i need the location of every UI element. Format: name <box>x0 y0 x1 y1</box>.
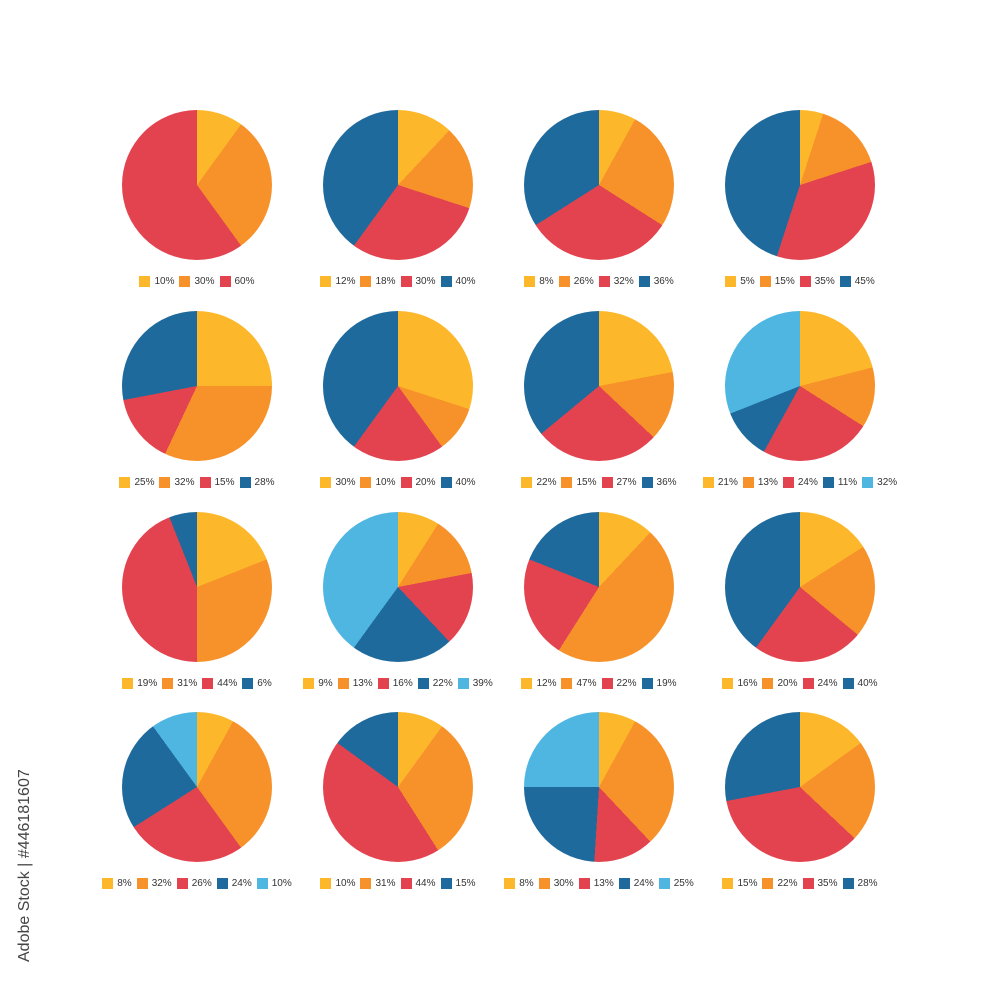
legend 12: 40% <box>858 678 878 688</box>
legend 2: 18% <box>375 276 396 286</box>
legend 3: 8% <box>539 276 554 286</box>
pie 11 <box>524 512 674 662</box>
legend 15: 13% <box>594 878 614 888</box>
legend 11 <box>521 678 677 689</box>
legend 3: 26% <box>574 276 594 286</box>
legend 15: 24% <box>634 878 654 888</box>
pie 8 <box>725 311 875 461</box>
legend 10: 22% <box>433 678 453 688</box>
legend 11: 22% <box>616 678 637 688</box>
pie 14 <box>323 712 473 862</box>
legend 16: 22% <box>777 878 798 888</box>
legend 4: 5% <box>740 276 755 286</box>
legend 8: 21% <box>718 476 738 488</box>
legend 5: 32% <box>174 476 194 488</box>
legend 10 <box>303 678 493 689</box>
legend 9: 6% <box>257 678 272 688</box>
legend 15 <box>504 878 694 889</box>
legend 7 <box>521 476 677 488</box>
legend 1 <box>139 276 255 287</box>
legend 14: 31% <box>375 878 396 888</box>
legend 14: 10% <box>335 878 355 888</box>
legend 5: 25% <box>134 476 154 488</box>
pie 2 <box>323 110 473 260</box>
pie 9 <box>122 512 272 662</box>
legend 16 <box>722 878 878 889</box>
legend 9 <box>122 678 272 689</box>
legend 13 <box>102 878 292 889</box>
legend 3: 36% <box>654 276 674 286</box>
legend 3: 32% <box>614 276 634 286</box>
legend 6: 40% <box>456 476 476 488</box>
legend 4: 35% <box>815 276 835 286</box>
legend 7: 27% <box>616 476 637 488</box>
pie 15 <box>524 712 674 862</box>
pie 16 <box>725 712 875 862</box>
legend 12: 20% <box>777 678 798 688</box>
legend 13: 24% <box>232 878 252 888</box>
legend 7: 22% <box>536 476 556 488</box>
legend 16: 15% <box>737 878 757 888</box>
legend 14 <box>320 878 476 889</box>
legend 3 <box>524 276 674 287</box>
legend 10: 9% <box>318 678 333 688</box>
legend 6: 10% <box>375 476 396 488</box>
legend 2: 30% <box>416 276 436 286</box>
legend 6: 20% <box>416 476 436 488</box>
pie 7 <box>524 311 674 461</box>
legend 12 <box>722 678 878 689</box>
legend 5: 28% <box>255 476 275 488</box>
legend 8: 11% <box>838 476 857 488</box>
legend 15: 25% <box>674 878 694 888</box>
pie 5 <box>122 311 272 461</box>
legend 4: 15% <box>775 276 795 286</box>
legend 7: 36% <box>657 476 677 488</box>
legend 8: 24% <box>798 476 818 488</box>
legend 5 <box>119 476 275 488</box>
legend 1: 60% <box>234 276 255 286</box>
legend 12: 16% <box>737 678 757 688</box>
legend 7: 15% <box>576 476 596 488</box>
pie 10 <box>323 512 473 662</box>
pie 1 <box>122 110 272 260</box>
pie 3 <box>524 110 674 260</box>
legend 12: 24% <box>818 678 838 688</box>
legend 8: 32% <box>877 476 897 488</box>
legend 13: 8% <box>117 878 132 888</box>
legend 16: 28% <box>858 878 878 888</box>
legend 8: 13% <box>758 476 778 488</box>
watermark id text: Adobe Stock | #446181607 <box>16 769 33 962</box>
legend 14: 44% <box>416 878 436 888</box>
legend 8 <box>703 476 897 488</box>
legend 11: 12% <box>536 678 556 688</box>
legend 16: 35% <box>818 878 838 888</box>
legend 11: 19% <box>657 678 677 688</box>
pie 4 <box>725 110 875 260</box>
legend 9: 31% <box>177 678 197 688</box>
legend 10: 39% <box>473 678 493 688</box>
legend 1: 30% <box>194 276 214 286</box>
legend 9: 19% <box>137 678 157 688</box>
legend 13: 26% <box>192 878 212 888</box>
legend 15: 30% <box>554 878 574 888</box>
legend 6: 30% <box>335 476 355 488</box>
legend 13: 32% <box>152 878 172 888</box>
legend 9: 44% <box>217 678 237 688</box>
legend 4 <box>725 276 875 287</box>
legend 6 <box>320 476 476 488</box>
legend 1: 10% <box>154 276 174 286</box>
pie 12 <box>725 512 875 662</box>
legend 13: 10% <box>272 878 292 888</box>
pie 13 <box>122 712 272 862</box>
legend 15: 8% <box>519 878 534 888</box>
legend 2: 12% <box>335 276 355 286</box>
legend 2 <box>320 276 476 287</box>
pie 6 <box>323 311 473 461</box>
legend 10: 13% <box>353 678 373 688</box>
legend 5: 15% <box>214 476 235 488</box>
legend 11: 47% <box>576 678 596 688</box>
legend 4: 45% <box>855 276 875 286</box>
legend 10: 16% <box>393 678 413 688</box>
legend 2: 40% <box>456 276 476 286</box>
legend 14: 15% <box>456 878 476 888</box>
